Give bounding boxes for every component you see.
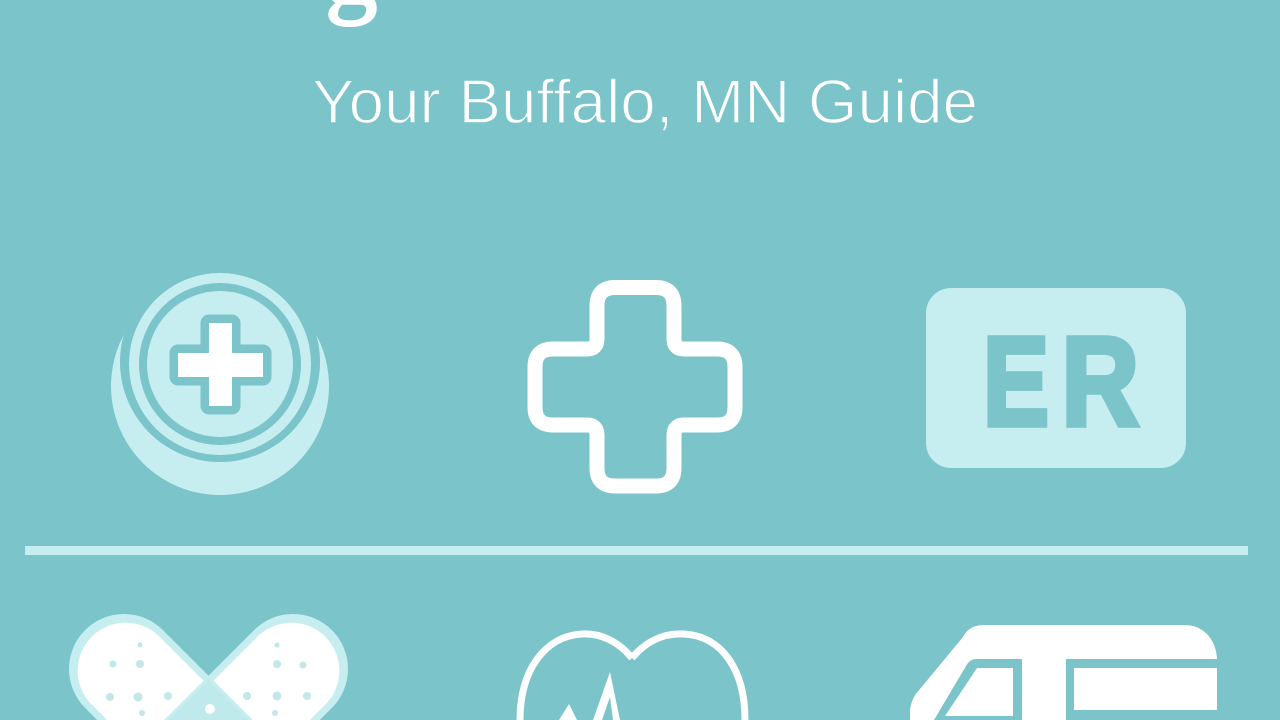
icon: ER sign: [926, 288, 1186, 468]
icon: ER sign: E: [983, 311, 1049, 452]
icon: crossed bandages: [69, 614, 348, 720]
icon: ER sign: R: [1062, 311, 1139, 452]
subtitle: Your Buffalo, MN Guide: [312, 68, 978, 137]
icon: outlined cross: [535, 288, 735, 486]
icon: ambulance: [910, 625, 1217, 720]
icon: medical button: [111, 262, 329, 495]
icon: heart with pulse: [520, 634, 745, 720]
